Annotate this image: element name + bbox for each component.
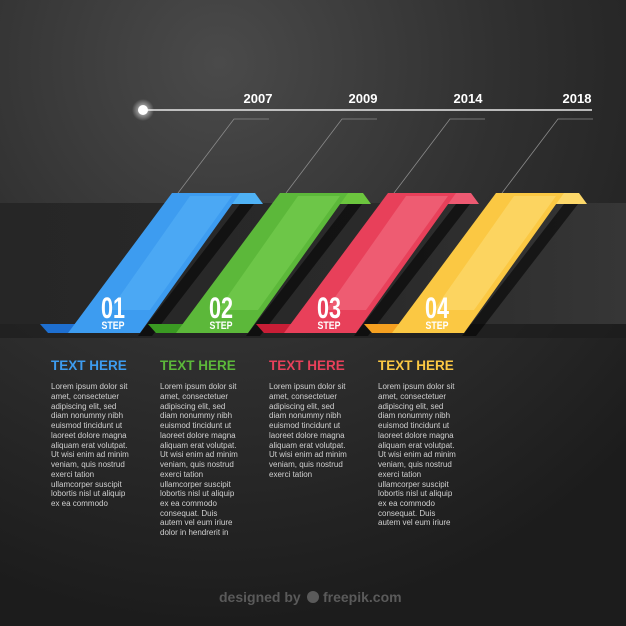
text column 2: Ut wisi enim ad minim: [160, 450, 238, 459]
text column 4: [378, 358, 456, 527]
text column 2: euismod tincidunt ut: [160, 421, 232, 430]
text column 2: [160, 358, 238, 537]
text column 4: diam nonummy nibh: [378, 411, 450, 420]
year labels: 2009: [349, 91, 377, 106]
text column 1: ullamcorper suscipit: [51, 480, 122, 489]
year labels: [244, 91, 591, 106]
text column 4: consequat. Duis: [378, 509, 435, 518]
text column 2: exerci tation: [160, 470, 203, 479]
text column 3: amet, consectetuer: [269, 392, 337, 401]
text column 3: TEXT HERE: [269, 358, 345, 373]
step ribbon 02 green: [148, 193, 371, 336]
text column 2: amet, consectetuer: [160, 392, 228, 401]
step ribbon 02 green: STEP: [210, 320, 233, 332]
text column 3: veniam, quis nostrud: [269, 460, 343, 469]
step ribbon 01 blue: STEP: [102, 320, 125, 332]
text column 1: Lorem ipsum dolor sit: [51, 382, 128, 391]
text column 3: exerci tation: [269, 470, 312, 479]
text column 3: adipiscing elit, sed: [269, 402, 334, 411]
text column 2: adipiscing elit, sed: [160, 402, 225, 411]
footer credit: designed by: [219, 589, 301, 605]
text column 1: laoreet dolore magna: [51, 431, 127, 440]
text column 2: dolor in hendrerit in: [160, 528, 228, 537]
step ribbon 02 green: 02: [209, 290, 233, 325]
text column 2: Lorem ipsum dolor sit: [160, 382, 237, 391]
text column 1: aliquam erat volutpat.: [51, 441, 128, 450]
text column 4: Ut wisi enim ad minim: [378, 450, 456, 459]
text column 1: Ut wisi enim ad minim: [51, 450, 129, 459]
step ribbon 01 blue: [40, 193, 263, 336]
text column 1: ex ea commodo: [51, 499, 108, 508]
text column 4: autem vel eum iriure: [378, 518, 451, 527]
text column 2: consequat. Duis: [160, 509, 217, 518]
timeline line: [132, 99, 592, 121]
text column 3: Ut wisi enim ad minim: [269, 450, 347, 459]
text column 4: adipiscing elit, sed: [378, 402, 443, 411]
text column 4: aliquam erat volutpat.: [378, 441, 454, 450]
text column 4: amet, consectetuer: [378, 392, 446, 401]
text column 2: ullamcorper suscipit: [160, 480, 231, 489]
text column 3: Lorem ipsum dolor sit: [269, 382, 346, 391]
text column 3: euismod tincidunt ut: [269, 421, 341, 430]
text column 1: lobortis nisl ut aliquip: [51, 489, 126, 498]
step ribbon 01 blue: 01: [101, 290, 125, 325]
text column 4: lobortis nisl ut aliquip: [378, 489, 453, 498]
text column 1: amet, consectetuer: [51, 392, 119, 401]
text column 1: adipiscing elit, sed: [51, 402, 116, 411]
text column 4: TEXT HERE: [378, 358, 454, 373]
step ribbon 03 red: [256, 193, 479, 336]
text column 3: diam nonummy nibh: [269, 411, 341, 420]
footer credit: [219, 589, 402, 605]
year labels: 2014: [454, 91, 483, 106]
text column 1: TEXT HERE: [51, 358, 127, 373]
step ribbon 04 yellow: [364, 193, 587, 336]
text column 4: euismod tincidunt ut: [378, 421, 450, 430]
text column 3: laoreet dolore magna: [269, 431, 345, 440]
text column 2: lobortis nisl ut aliquip: [160, 489, 235, 498]
text column 2: diam nonummy nibh: [160, 411, 232, 420]
text column 3: aliquam erat volutpat.: [269, 441, 346, 450]
text column 1: diam nonummy nibh: [51, 411, 123, 420]
text column 4: exerci tation: [378, 470, 421, 479]
footer credit: freepik.com: [323, 589, 402, 605]
text column 2: laoreet dolore magna: [160, 431, 236, 440]
text column 4: laoreet dolore magna: [378, 431, 454, 440]
text column 1: exerci tation: [51, 470, 94, 479]
text column 2: aliquam erat volutpat.: [160, 441, 236, 450]
text column 2: autem vel eum iriure: [160, 518, 233, 527]
text column 2: TEXT HERE: [160, 358, 236, 373]
text column 1: [51, 358, 129, 508]
text column 4: ex ea commodo: [378, 499, 435, 508]
text column 4: Lorem ipsum dolor sit: [378, 382, 455, 391]
step ribbon 04 yellow: STEP: [426, 320, 449, 332]
text column 4: ullamcorper suscipit: [378, 480, 449, 489]
text column 1: euismod tincidunt ut: [51, 421, 123, 430]
text column 2: ex ea commodo: [160, 499, 217, 508]
text column 1: veniam, quis nostrud: [51, 460, 125, 469]
text column 3: [269, 358, 347, 479]
year labels: 2007: [244, 91, 272, 106]
text column 2: veniam, quis nostrud: [160, 460, 234, 469]
step ribbon 03 red: 03: [317, 290, 341, 325]
year labels: 2018: [563, 91, 591, 106]
connector lines: [178, 119, 593, 193]
step ribbon 03 red: STEP: [318, 320, 341, 332]
step ribbon 04 yellow: 04: [425, 290, 449, 325]
text column 4: veniam, quis nostrud: [378, 460, 452, 469]
